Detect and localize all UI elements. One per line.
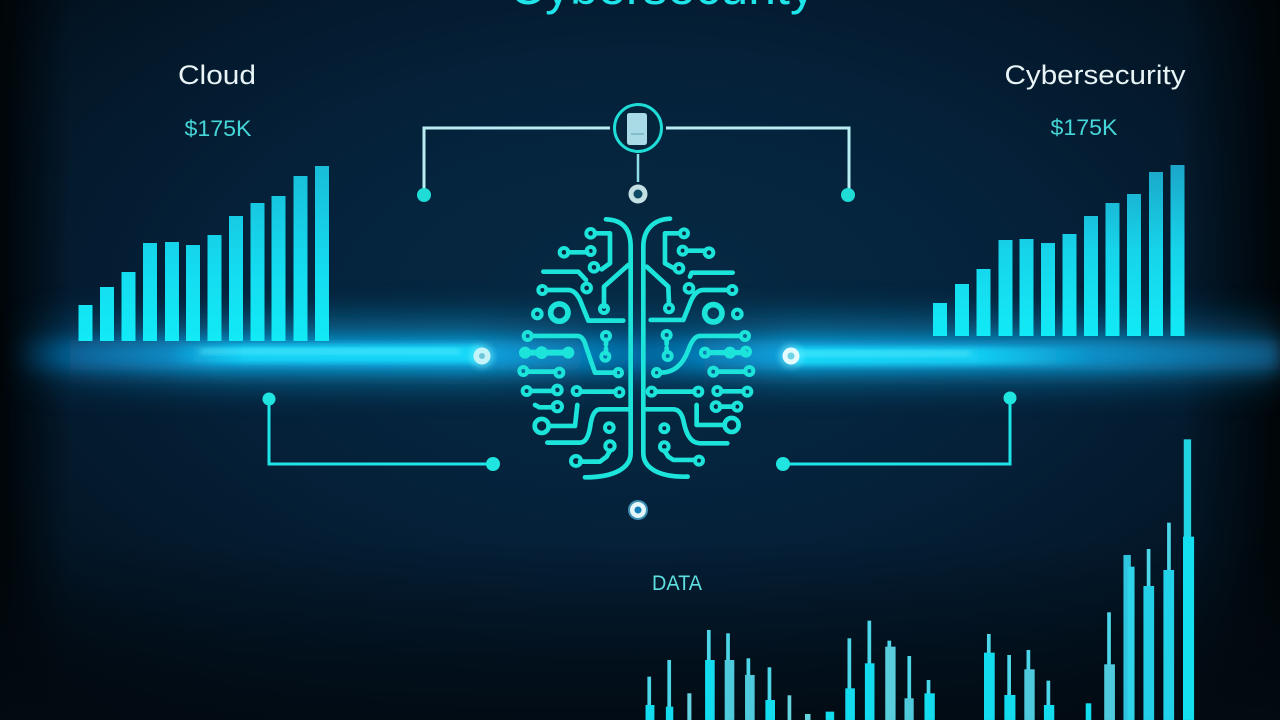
label: Data: DATA xyxy=(652,572,702,595)
right band node xyxy=(779,344,803,368)
bar chart: Cybersecurity xyxy=(933,165,1184,336)
icon: document in circle xyxy=(614,104,662,152)
thin spikes xyxy=(647,523,1171,720)
bar chart: data spikes xyxy=(646,439,1194,720)
left hemisphere xyxy=(519,219,631,477)
left connector node xyxy=(417,188,431,202)
right connector node xyxy=(841,188,855,202)
bar chart: Cloud xyxy=(78,166,329,341)
left band node xyxy=(470,344,494,368)
node: small top xyxy=(628,184,648,204)
right hemisphere xyxy=(643,219,753,477)
panel: Cloud xyxy=(78,60,329,341)
brain circuit icon xyxy=(519,219,753,477)
value: Cloud amount: $175K xyxy=(184,116,252,141)
heading: Cloud: Cloud xyxy=(178,60,256,90)
stem xyxy=(637,154,639,182)
wide bars xyxy=(646,439,1194,720)
heading: Cybersecurity: Cybersecurity xyxy=(1004,60,1186,90)
node: bottom of brain xyxy=(628,500,648,520)
lower left connector xyxy=(262,392,500,471)
connector lines xyxy=(424,128,849,195)
glowing horizontal light band xyxy=(15,318,1280,384)
top connector with document icon xyxy=(417,104,855,204)
value: Cybersecurity amount: $175K xyxy=(1050,115,1118,140)
lower right connector xyxy=(776,392,1016,471)
panel: Cybersecurity xyxy=(933,60,1186,336)
